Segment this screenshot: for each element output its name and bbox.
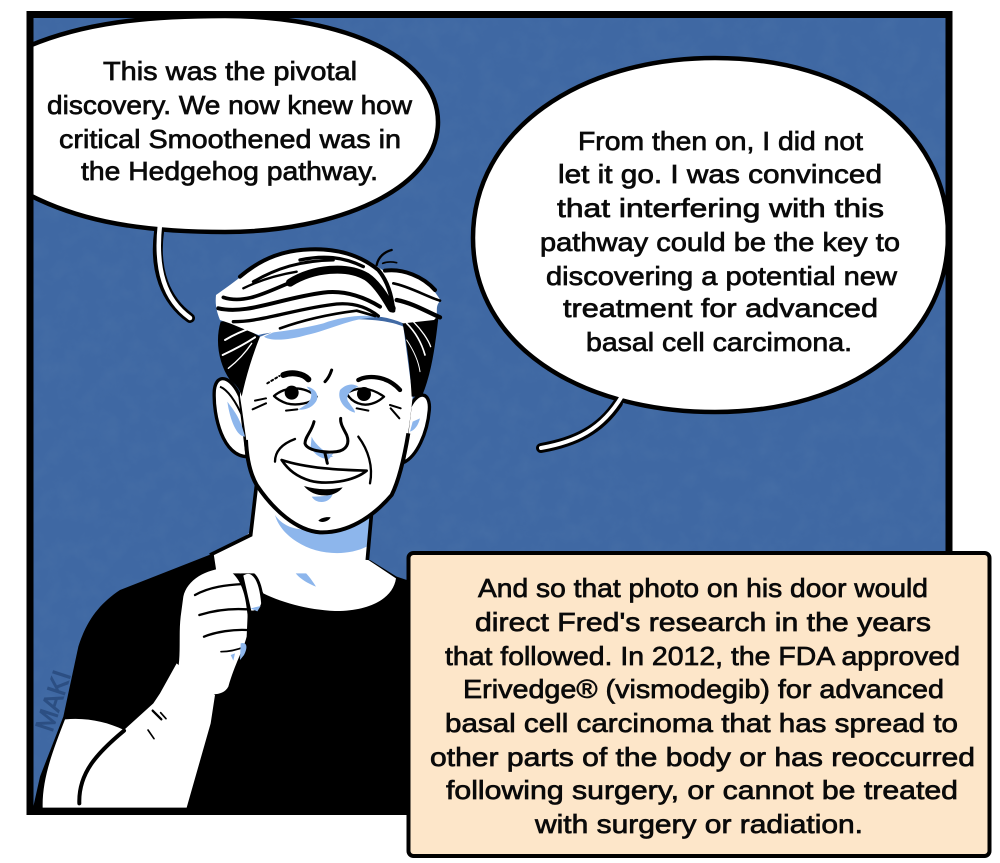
bubble text: left: the Hedgehog pathway.: [81, 156, 378, 186]
speech bubble: right: [473, 58, 948, 448]
bubble text: right: that interfering with this: [557, 193, 884, 223]
hair base: [216, 249, 441, 335]
caption text: basal cell carcinoma that has spread to: [445, 708, 958, 738]
lower lip and chin: [312, 494, 333, 502]
signature: MAKI: [29, 667, 77, 735]
nose: [311, 437, 333, 460]
caption box: [408, 553, 990, 856]
bubble text: right: treatment for advanced: [563, 293, 878, 323]
bubble text: left: discovery. We now knew how: [47, 90, 412, 120]
bubble text: left: [47, 56, 412, 186]
bubble text: left: This was the pivotal: [103, 56, 357, 86]
left ear: [214, 379, 247, 457]
neck: [214, 490, 306, 574]
mouth: [282, 460, 367, 483]
side hair masses: [218, 320, 260, 397]
neck shadow mark: [296, 573, 316, 586]
figure: head: [210, 249, 441, 573]
bubble text: right: pathway could be the key to: [540, 227, 900, 257]
caption text: And so that photo on his door would: [478, 573, 928, 603]
black t-shirt: [33, 553, 437, 810]
eyebrows and eyes: [253, 370, 401, 418]
fist: [177, 568, 248, 694]
hair strokes: [218, 249, 440, 328]
hair highlights at sides: [223, 322, 431, 372]
speech tail: right bubble: [541, 396, 622, 448]
neck shadow: [275, 512, 372, 553]
eye shadows: [298, 384, 358, 413]
caption text: Erivedge® (vismodegib) for advanced: [463, 674, 944, 704]
bubble text: right: let it go. I was convinced: [558, 159, 882, 189]
caption text: [430, 573, 975, 839]
bubble text: right: [540, 126, 900, 357]
bubble text: right: discovering a potential new: [546, 261, 897, 291]
thumb: [242, 572, 263, 612]
face: [240, 319, 413, 532]
speech bubble: left: [20, 16, 438, 318]
bubble text: right: basal cell carcimona.: [586, 327, 852, 357]
neck and collar: [240, 533, 396, 611]
caption text: direct Fred's research in the years: [475, 607, 931, 637]
caption text: following surgery, or cannot be treated: [446, 775, 958, 805]
caption text: with surgery or radiation.: [534, 809, 863, 839]
caption text: other parts of the body or has reoccurred: [430, 742, 975, 772]
forehead shadow: [264, 316, 375, 340]
figure: torso and arm: [33, 530, 437, 810]
caption text: that followed. In 2012, the FDA approved: [445, 641, 960, 671]
speech tail: left bubble: [158, 224, 190, 318]
forearm: [43, 663, 215, 808]
bubble text: right: From then on, I did not: [578, 126, 864, 156]
finger lines: [79, 563, 251, 803]
bubble text: left: critical Smoothened was in: [59, 124, 401, 154]
right ear: [403, 395, 429, 463]
knuckle highlights: [231, 606, 261, 661]
